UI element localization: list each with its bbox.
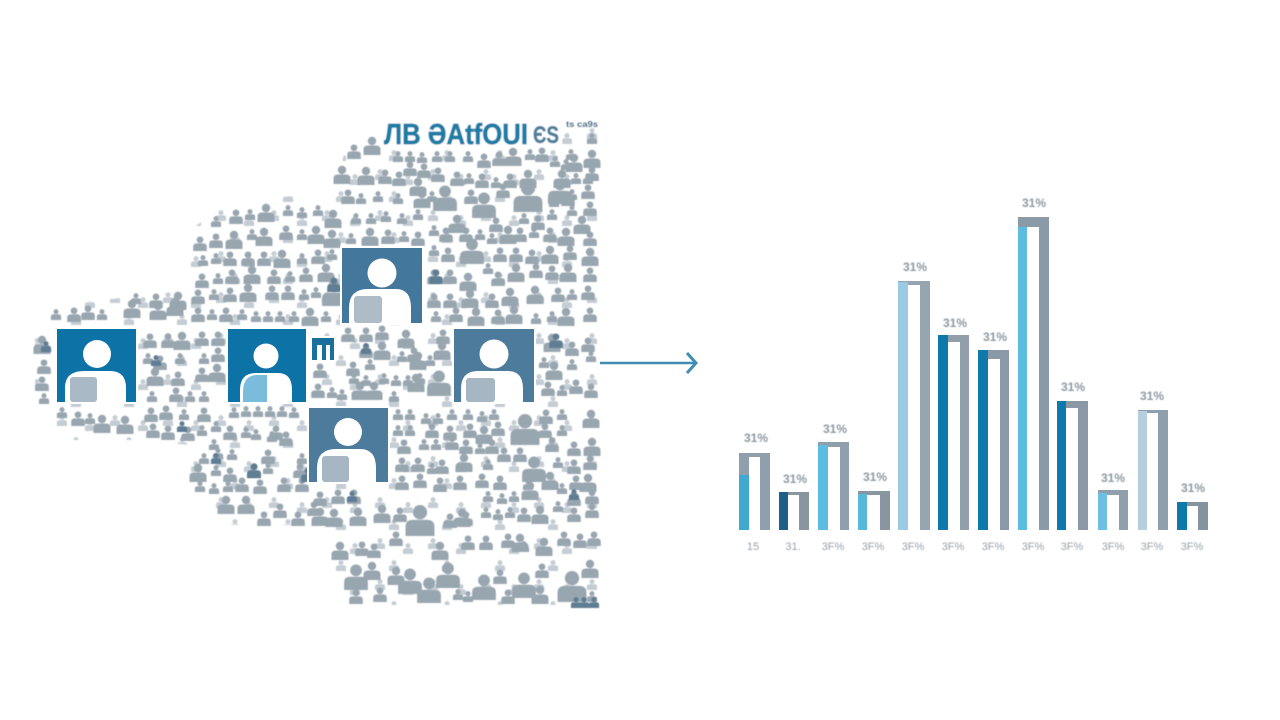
- portrait card: top centre: [342, 248, 422, 323]
- bar 11: [1138, 410, 1168, 530]
- garbled title: ЄS: [533, 122, 559, 149]
- portrait card: lower centre: [309, 408, 388, 482]
- bar 3: [818, 442, 849, 530]
- bar chart: [739, 217, 1208, 530]
- portrait card: right: [454, 329, 534, 402]
- crowd silhouette filler of tiny person icons: [35, 125, 598, 605]
- value labels above bars: 31%: [744, 431, 768, 445]
- value labels above bars: 31%: [983, 330, 1007, 344]
- bar 12: [1177, 502, 1208, 530]
- bar 9: [1057, 401, 1088, 530]
- category labels below bars: 3F%: [1181, 541, 1204, 553]
- garbled title: ЛB ƏAtfOUI: [384, 119, 528, 151]
- category labels below bars: 3F%: [862, 541, 885, 553]
- category labels below bars: 3F%: [1022, 541, 1045, 553]
- bar 6: [938, 335, 969, 530]
- garbled title: ts ca9s: [566, 120, 599, 129]
- category labels below bars: 31.: [785, 541, 801, 553]
- crowd of small person icons: [34, 133, 601, 604]
- bar 4: [858, 491, 890, 530]
- value labels above bars: 31%: [1022, 196, 1046, 210]
- value labels above bars: 31%: [1061, 380, 1085, 394]
- category labels below bars: 3F%: [1102, 541, 1125, 553]
- darker accent person icons: [41, 269, 599, 608]
- value labels above bars: 31%: [783, 472, 807, 486]
- portrait card: far left: [57, 329, 136, 402]
- category labels below bars: [747, 541, 1204, 553]
- bar 7: [978, 350, 1009, 530]
- value labels above bars: [744, 196, 1205, 495]
- bar 8: [1018, 217, 1049, 530]
- category labels below bars: 3F%: [822, 541, 845, 553]
- value labels above bars: 31%: [823, 422, 847, 436]
- bar 2: [779, 492, 809, 530]
- category labels below bars: 15: [747, 541, 759, 553]
- category labels below bars: 3F%: [902, 541, 925, 553]
- bar 1: [739, 453, 770, 530]
- category labels below bars: 3F%: [1061, 541, 1084, 553]
- value labels above bars: 31%: [1140, 389, 1164, 403]
- bar 10: [1098, 490, 1128, 530]
- value labels above bars: 31%: [943, 316, 967, 330]
- category labels below bars: 3F%: [942, 541, 965, 553]
- value labels above bars: 31%: [903, 260, 927, 274]
- category labels below bars: 3F%: [1141, 541, 1164, 553]
- small blue portrait fragment: [312, 338, 334, 360]
- bar 5: [898, 281, 930, 530]
- value labels above bars: 31%: [1181, 481, 1205, 495]
- value labels above bars: 31%: [863, 470, 887, 484]
- value labels above bars: 31%: [1101, 471, 1125, 485]
- portrait card: centre left: [228, 329, 306, 402]
- arrow from crowd to chart: [600, 353, 696, 373]
- category labels below bars: 3F%: [982, 541, 1005, 553]
